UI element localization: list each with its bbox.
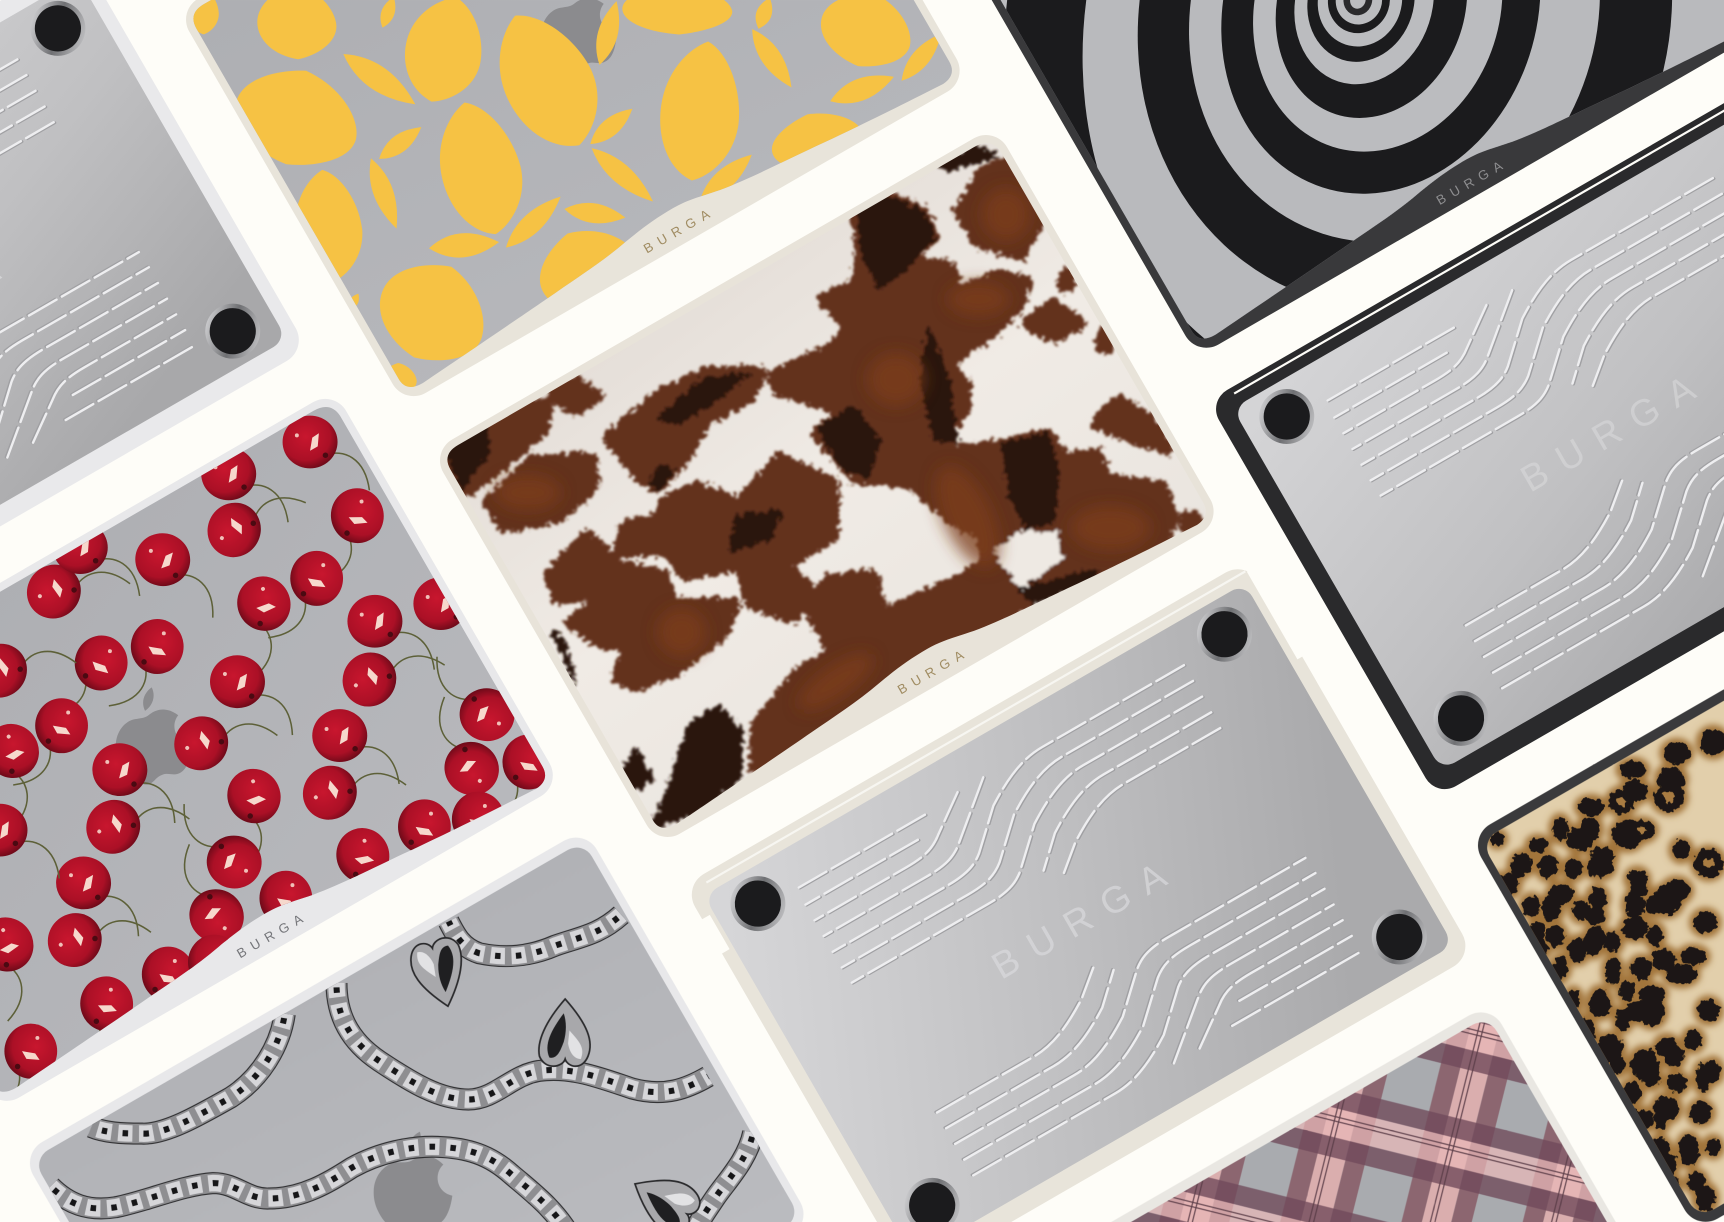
case: black and grey spiral print: BURGA: [1434, 158, 1505, 208]
case: cherry print: BURGA: [234, 911, 306, 961]
tan halos around spots: [1449, 729, 1724, 1222]
brown cow spots: [446, 146, 1197, 827]
white patch inside brown: [993, 531, 1063, 589]
case: cherry print: [0, 390, 562, 1121]
case: black and grey spiral print: [992, 0, 1724, 348]
silver chains: [51, 915, 753, 1222]
case: black frame clear back, right: [1208, 74, 1724, 797]
black leopard spots: [1449, 729, 1724, 1222]
case: pink plaid print: [926, 1001, 1717, 1222]
case: lemon print: BURGA: [641, 206, 712, 256]
case: black frame clear back, right: BURGA: [1513, 367, 1702, 500]
case: cowhide print: BURGA: [895, 647, 966, 697]
case: cream frame clear back, centre: BURGA: [984, 854, 1173, 987]
case: clear frosted back, top left: [0, 0, 308, 674]
case: cowhide print: [429, 121, 1222, 847]
soft mid-tone fur shading: [495, 188, 1150, 720]
case: leopard print: [1449, 511, 1724, 1222]
case: silver chain print: [21, 829, 825, 1222]
case: lemon print: [186, 0, 960, 396]
case: cream frame clear back, centre: [682, 560, 1475, 1222]
